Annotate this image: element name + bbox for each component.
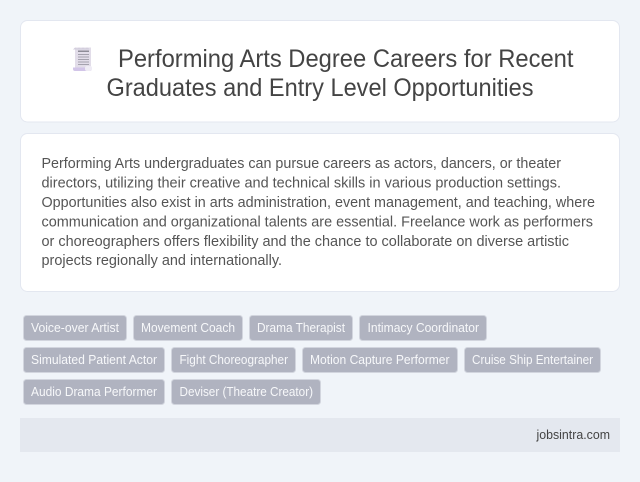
description text: or choreographers offers flexibility and the chance to collaborate on diverse artistic — [42, 234, 569, 250]
tag: Motion Capture Performer — [302, 348, 458, 372]
tag: Drama Therapist: Drama Therapist — [257, 321, 345, 335]
tag: Intimacy Coordinator — [360, 316, 486, 340]
description text — [42, 156, 595, 269]
tag: Deviser (Theatre Creator) — [172, 380, 320, 404]
tag: Cruise Ship Entertainer: Cruise Ship Entertainer — [472, 353, 593, 367]
title: Graduates and Entry Level Opportunities — [106, 74, 534, 102]
description text: Opportunities also exist in arts administration, event management, and teaching, where — [42, 195, 595, 211]
footer bar — [20, 418, 620, 452]
tag: Motion Capture Performer: Motion Capture Performer — [310, 353, 450, 367]
tag: Audio Drama Performer — [24, 380, 164, 404]
description text: projects regionally and internationally. — [42, 253, 282, 269]
tag: Deviser (Theatre Creator): Deviser (Theatre Creator) — [180, 385, 313, 399]
tag: Voice-over Artist: Voice-over Artist — [31, 321, 119, 335]
tag: Audio Drama Performer: Audio Drama Performer — [31, 385, 157, 399]
tag: Drama Therapist — [250, 316, 352, 340]
panel: description — [20, 134, 620, 292]
panel: title card — [20, 20, 620, 122]
tag list — [24, 316, 600, 404]
description text: communication and organizational talents are essential. Freelance work as performers — [42, 214, 593, 230]
tag: Cruise Ship Entertainer — [464, 348, 600, 372]
tag: Fight Choreographer — [172, 348, 296, 372]
tag: Fight Choreographer: Fight Choreographer — [180, 353, 288, 367]
footer source text: jobsintra.com — [536, 428, 610, 442]
tag: Movement Coach: Movement Coach — [141, 321, 235, 335]
title: Performing Arts Degree Careers for Recent — [118, 45, 574, 73]
tag: Simulated Patient Actor — [24, 348, 164, 372]
tag: Voice-over Artist — [24, 316, 126, 340]
icon: paper scroll — [73, 48, 92, 71]
tag: Simulated Patient Actor: Simulated Patient Actor — [31, 353, 157, 367]
title — [106, 45, 574, 102]
tag: Intimacy Coordinator: Intimacy Coordinator — [368, 321, 479, 335]
description text: Performing Arts undergraduates can pursue careers as actors, dancers, or theater — [42, 156, 561, 172]
tag: Movement Coach — [134, 316, 242, 340]
description text: directors, utilizing their creative and technical skills in various production settings. — [42, 176, 561, 192]
